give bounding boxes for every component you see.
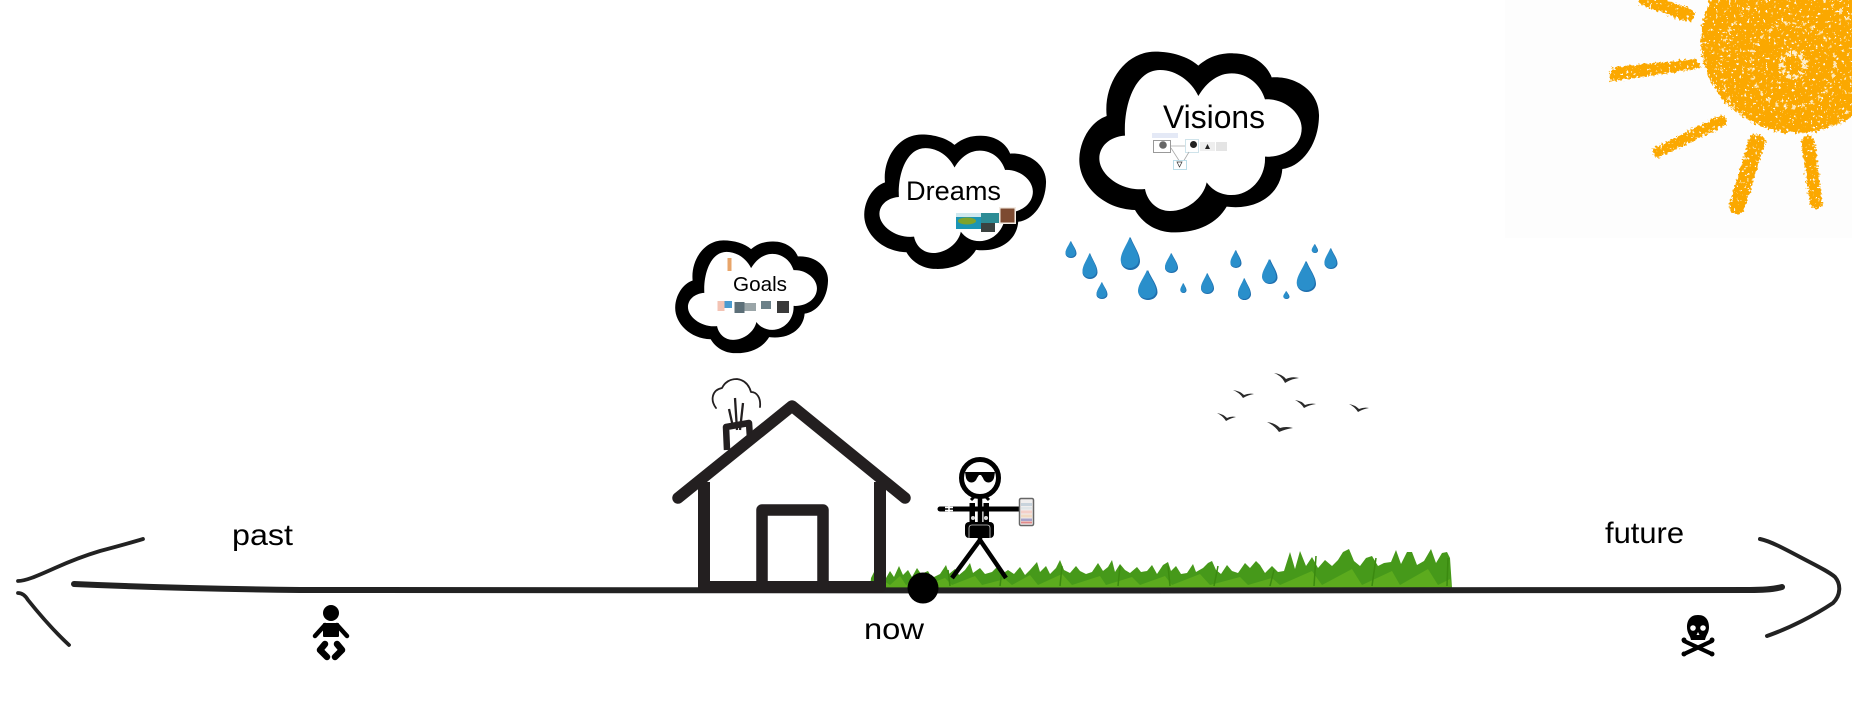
sun picture bbox=[1505, 0, 1852, 238]
backpack bbox=[965, 496, 994, 538]
photo thumbnails bbox=[718, 258, 789, 313]
now marker bbox=[908, 572, 938, 604]
heading: Goals: Goals bbox=[733, 273, 787, 296]
arrow head: right (future) bbox=[1760, 539, 1839, 636]
heading: Dreams: Dreams bbox=[906, 176, 1001, 206]
walls and floor bbox=[704, 482, 880, 587]
icon: skull and crossbones bbox=[1682, 615, 1714, 656]
arms bbox=[940, 506, 1020, 512]
phone bbox=[1020, 498, 1034, 526]
stick figure bbox=[940, 460, 1034, 578]
diagram thumbnail bbox=[1152, 133, 1227, 170]
roof bbox=[678, 406, 905, 498]
pen in hand bbox=[945, 504, 953, 514]
sun rays bbox=[1614, 0, 1816, 206]
body and legs bbox=[952, 498, 1006, 578]
sun disc bbox=[1701, 0, 1852, 137]
chimney smoke bbox=[729, 398, 743, 430]
label: now: now bbox=[864, 613, 924, 646]
cloud: dreams bbox=[864, 134, 1046, 269]
arrow head: left (past) bbox=[18, 539, 143, 645]
label: past: past bbox=[232, 519, 294, 552]
chimney bbox=[726, 423, 750, 450]
timeline axis bbox=[74, 584, 1782, 591]
cloud: goals bbox=[675, 240, 828, 353]
heading: Visions: Visions bbox=[1163, 99, 1265, 135]
sunglasses bbox=[965, 472, 995, 482]
label: future: future bbox=[1605, 517, 1684, 550]
cloud: visions bbox=[1079, 52, 1319, 232]
grass bbox=[870, 549, 1452, 588]
icon: baby bbox=[315, 605, 347, 657]
door bbox=[762, 510, 823, 587]
house bbox=[678, 379, 905, 587]
photo thumbnails bbox=[956, 207, 1016, 232]
rain drops bbox=[1066, 237, 1338, 300]
birds bbox=[1217, 373, 1369, 432]
head bbox=[962, 460, 998, 496]
